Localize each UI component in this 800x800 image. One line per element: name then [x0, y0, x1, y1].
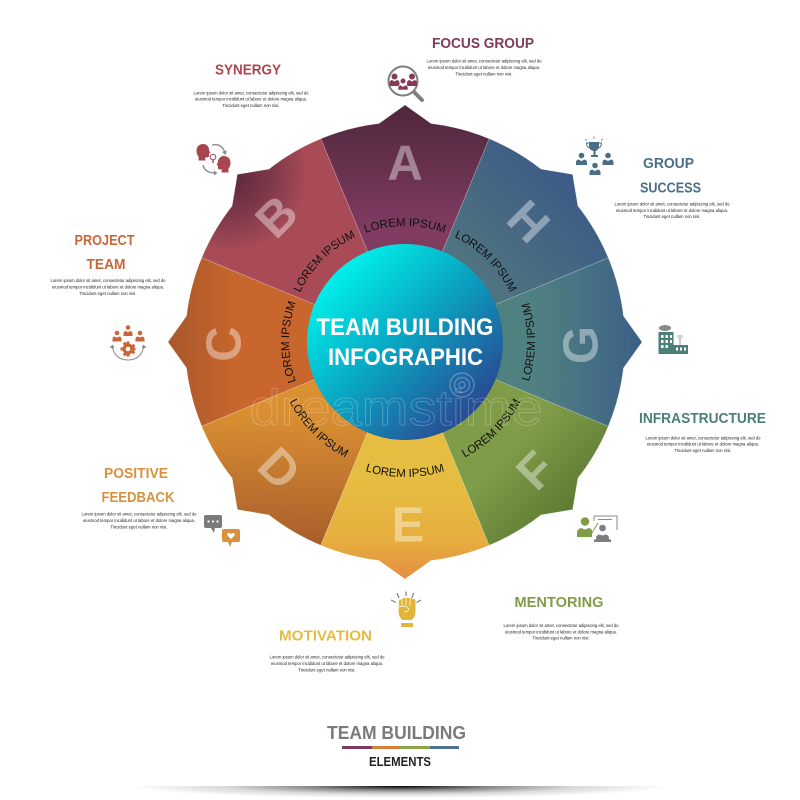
block: infrastructure [639, 325, 766, 453]
block: group success [576, 136, 730, 219]
icon: trophy and people [576, 136, 614, 175]
description [50, 278, 166, 296]
icon: mentor and board [577, 516, 617, 542]
description: Tincidunt eget nullam non nisi. [298, 668, 356, 672]
description: Tincidunt eget nullam non nisi. [80, 291, 136, 296]
description: eiusmod tempor incididunt ut labore et dolore magna aliqua. [428, 65, 540, 70]
block: mentoring [504, 516, 619, 641]
description: Tincidunt eget nullam non nisi. [644, 214, 700, 219]
heading: PROJECT [74, 233, 135, 249]
description: Tincidunt eget nullam non nisi. [110, 524, 168, 530]
label C: LOREM IPSUM [281, 301, 296, 384]
icon: raised fist [391, 592, 421, 627]
wheel of eight segments [168, 105, 642, 579]
footer title [327, 722, 466, 769]
description: eiusmod tempor incididunt ut labore et dolore magna aliqua. [271, 661, 383, 666]
description: Tincidunt eget nullam non nisi. [456, 72, 512, 76]
letter F: F [506, 441, 566, 501]
heading [74, 233, 135, 273]
description [270, 654, 385, 672]
label D: LOREM IPSUM [290, 398, 348, 458]
description: Lorem ipsum dolor sit amet, consectetur adipiscing elit, sed do [50, 278, 166, 283]
icon: buildings and cloud [658, 325, 688, 354]
label A: LOREM IPSUM [364, 218, 446, 232]
heading: FEEDBACK [102, 490, 175, 506]
description: Lorem ipsum dolor sit amet, consectetur adipiscing elit, sed do [646, 436, 761, 440]
description: Lorem ipsum dolor sit amet, consectetur adipiscing elit, sed do [270, 654, 385, 660]
icon: heads and bulb [196, 144, 230, 176]
heading: POSITIVE [104, 466, 168, 482]
icon: team and gear [110, 325, 146, 360]
letter B: B [245, 185, 309, 249]
segment D [178, 282, 465, 569]
description: eiusmod tempor incididunt ut labore et dolore magna aliqua. [52, 284, 164, 290]
description: Lorem ipsum dolor sit amet, consectetur adipiscing elit, sed do [82, 512, 197, 516]
segment H [345, 115, 632, 402]
hub title: INFOGRAPHIC [328, 344, 483, 371]
heading: INFRASTRUCTURE [639, 411, 766, 427]
stock watermark: dreamstime [250, 380, 542, 436]
label E: LOREM IPSUM [366, 464, 444, 477]
description [426, 58, 542, 76]
letter E: E [392, 498, 424, 552]
block: motivation [270, 592, 421, 672]
heading: MOTIVATION [279, 628, 372, 644]
heading [640, 156, 701, 196]
description: eiusmod tempor incididunt ut labore et dolore magna aliqua. [83, 518, 195, 523]
description [646, 436, 761, 453]
description [614, 202, 730, 219]
description: Tincidunt eget nullam non nisi. [222, 103, 280, 108]
label G: LOREM IPSUM [522, 303, 535, 381]
segment B [178, 115, 465, 402]
description [504, 623, 619, 641]
heading: TEAM [86, 257, 126, 273]
description: eiusmod tempor incididunt ut labore et dolore magna aliqua. [616, 208, 728, 213]
segment letters [198, 136, 608, 552]
description: Lorem ipsum dolor sit amet, consectetur adipiscing elit, sed do [426, 58, 542, 64]
block: positive feedback [82, 466, 240, 547]
description: eiusmod tempor incididunt ut labore et dolore magna aliqua. [505, 630, 617, 634]
description: eiusmod tempor incididunt ut labore et dolore magna aliqua. [647, 442, 759, 447]
subtitle: ELEMENTS [369, 755, 431, 769]
heading [102, 466, 175, 506]
label H: LOREM IPSUM [455, 230, 517, 292]
description: Tincidunt eget nullam non nisi. [532, 636, 590, 641]
description: Tincidunt eget nullam non nisi. [674, 448, 732, 453]
segment A [321, 105, 489, 342]
colour bar [342, 746, 459, 749]
segment G [405, 258, 642, 426]
segment E [321, 342, 489, 579]
label F: LOREM IPSUM [462, 398, 520, 458]
letter C: C [198, 326, 252, 362]
block: project team [50, 233, 166, 360]
curved segment labels [281, 218, 535, 477]
icon: magnifier with people [388, 66, 422, 100]
description: Lorem ipsum dolor sit amet, consectetur adipiscing elit, sed do [614, 202, 730, 206]
footer title: TEAM BUILDING [327, 722, 466, 743]
hub title: TEAM BUILDING [316, 314, 494, 341]
heading: GROUP [643, 156, 694, 172]
block: focus group [388, 36, 542, 100]
icon: speech bubbles [204, 515, 240, 547]
block: synergy [194, 62, 309, 176]
letter H: H [496, 190, 560, 254]
description: Lorem ipsum dolor sit amet, consectetur adipiscing elit, sed do [504, 623, 619, 628]
heading: FOCUS GROUP [432, 36, 534, 52]
description: eiusmod tempor incididunt ut labore et dolore magna aliqua. [195, 97, 307, 102]
heading: SYNERGY [215, 62, 281, 78]
letter G: G [554, 326, 608, 364]
heading: MENTORING [514, 595, 604, 611]
description [82, 512, 197, 530]
central circle with title [307, 244, 503, 440]
label B: LOREM IPSUM [293, 230, 355, 292]
letter A: A [387, 136, 423, 190]
segment F [345, 282, 632, 569]
hub title [316, 314, 494, 371]
description: Lorem ipsum dolor sit amet, consectetur adipiscing elit, sed do [194, 90, 309, 96]
letter D: D [247, 437, 311, 501]
floor shadow [130, 786, 670, 798]
description [194, 90, 309, 108]
heading: SUCCESS [640, 180, 701, 196]
segment C [168, 258, 405, 426]
